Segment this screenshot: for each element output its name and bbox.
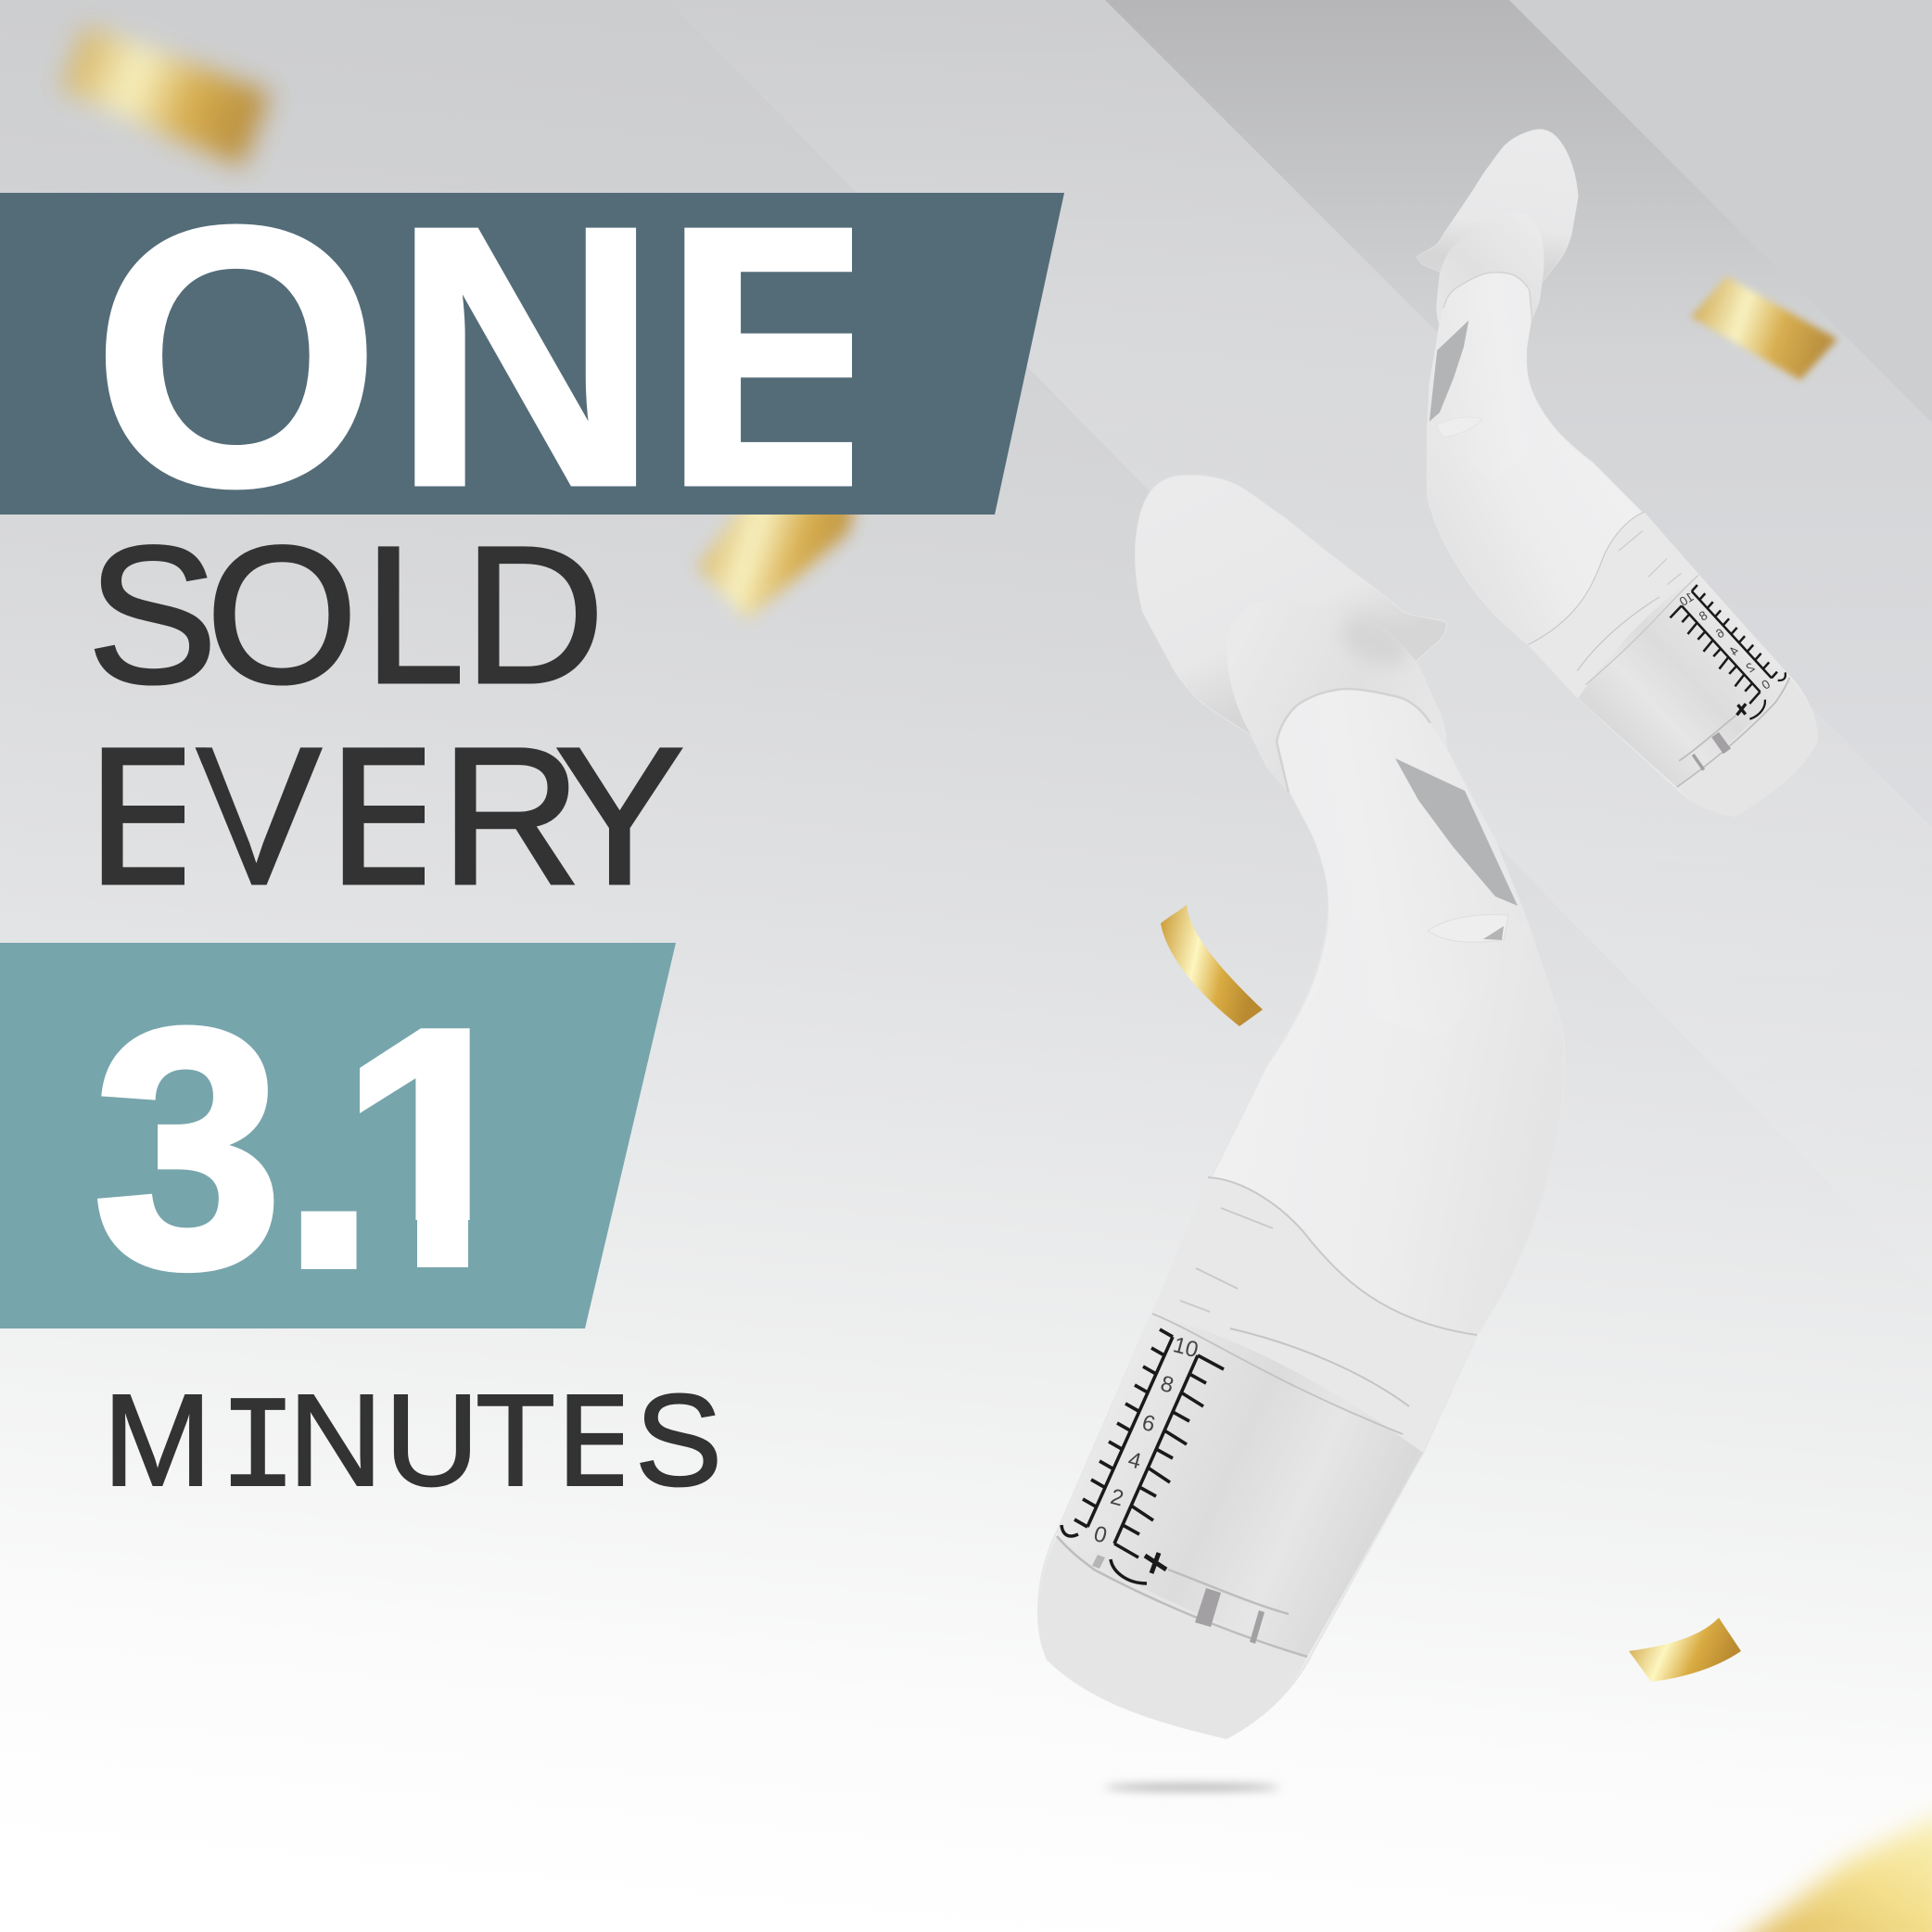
clear sleeve: [1057, 1177, 1477, 1657]
measurement ticks: [1663, 570, 1784, 718]
text: SOLD: SOLD: [87, 505, 604, 724]
sleeve upper band: [1500, 502, 1723, 708]
mouthpiece cap: [1391, 122, 1604, 317]
sleeve band lines: [1152, 1314, 1409, 1434]
device: large product: [1038, 476, 1564, 1738]
sleeve top edge: [1500, 512, 1672, 644]
device: small product: [1328, 105, 1836, 877]
neck: [1277, 689, 1527, 1038]
collar edge: [1437, 261, 1539, 345]
measurement ticks: [1074, 1329, 1224, 1557]
measurement numbers: 2: [1108, 1484, 1126, 1512]
mouthpiece spout: [1227, 600, 1446, 793]
grey window: [1395, 758, 1518, 906]
slot: [1436, 410, 1484, 439]
spout shading: [1334, 608, 1416, 675]
measurement numbers: 2: [1744, 660, 1757, 675]
sleeve marks: [1180, 1208, 1273, 1312]
measurement numbers: 8: [1158, 1371, 1176, 1399]
text: EVERY: EVERY: [87, 706, 685, 925]
base marks: [1710, 731, 1732, 756]
confetti: bottom-right corner: [1724, 1808, 1932, 1932]
measurement numbers: 10: [1171, 1332, 1201, 1363]
plus sign: [1734, 703, 1749, 717]
measurement numbers: 8: [1697, 608, 1710, 624]
confetti: sharp centre: [1161, 905, 1263, 1026]
confetti: lower right: [1629, 1618, 1741, 1682]
neck: [1386, 261, 1582, 494]
slot: [1428, 915, 1508, 942]
base marks: [1195, 1588, 1221, 1627]
measurement numbers: 6: [1713, 626, 1727, 642]
slot shadow: [1483, 926, 1504, 940]
headline: ONE: ONE: [92, 148, 909, 564]
measurement numbers: 0: [1091, 1521, 1110, 1549]
sleeve top edge: [1208, 1177, 1477, 1335]
clear sleeve: [1500, 485, 1811, 818]
confetti: top right: [1691, 276, 1837, 380]
plus sign: [1145, 1553, 1166, 1573]
number: 3.1: 3.1: [94, 959, 529, 1338]
sleeve band lines: [1560, 575, 1720, 686]
measurement numbers: 4: [1125, 1447, 1144, 1475]
device body: [1038, 476, 1564, 1738]
rotation arrows: [1739, 672, 1796, 719]
collar edge: [1277, 689, 1430, 793]
confetti: blurred top-left: [61, 26, 271, 167]
device body: [1328, 105, 1836, 877]
measurement numbers: 4: [1727, 643, 1741, 659]
background diagonal top-right panel: [1509, 0, 1932, 423]
base ring lines: [1655, 678, 1811, 787]
text: MINUTES: MINUTES: [103, 1366, 722, 1525]
base cap: [1655, 674, 1836, 831]
shadow under device: [1104, 1784, 1280, 1791]
confetti: blurred behind banner: [697, 491, 858, 619]
measurement numbers: 6: [1139, 1410, 1158, 1438]
sleeve upper band: [1152, 1177, 1477, 1453]
grey window: [1403, 321, 1495, 422]
mouthpiece spout: [1413, 205, 1566, 348]
measurement numbers: [1091, 1332, 1201, 1549]
measurement numbers: 0: [1759, 677, 1773, 693]
banner: ONE: [0, 193, 1064, 515]
background diagonal light panel: [667, 0, 1932, 1289]
base ring lines: [1057, 1536, 1307, 1657]
measurement numbers: 10: [1676, 590, 1697, 609]
background diagonal dark stripe: [1105, 0, 1932, 827]
measurement numbers: [1675, 574, 1773, 710]
rotation arrows: [1061, 1525, 1147, 1583]
base cap: [1039, 1536, 1307, 1738]
banner: 3.1: [0, 943, 676, 1328]
mouthpiece cap: [1136, 476, 1446, 735]
sleeve marks: [1615, 524, 1684, 596]
